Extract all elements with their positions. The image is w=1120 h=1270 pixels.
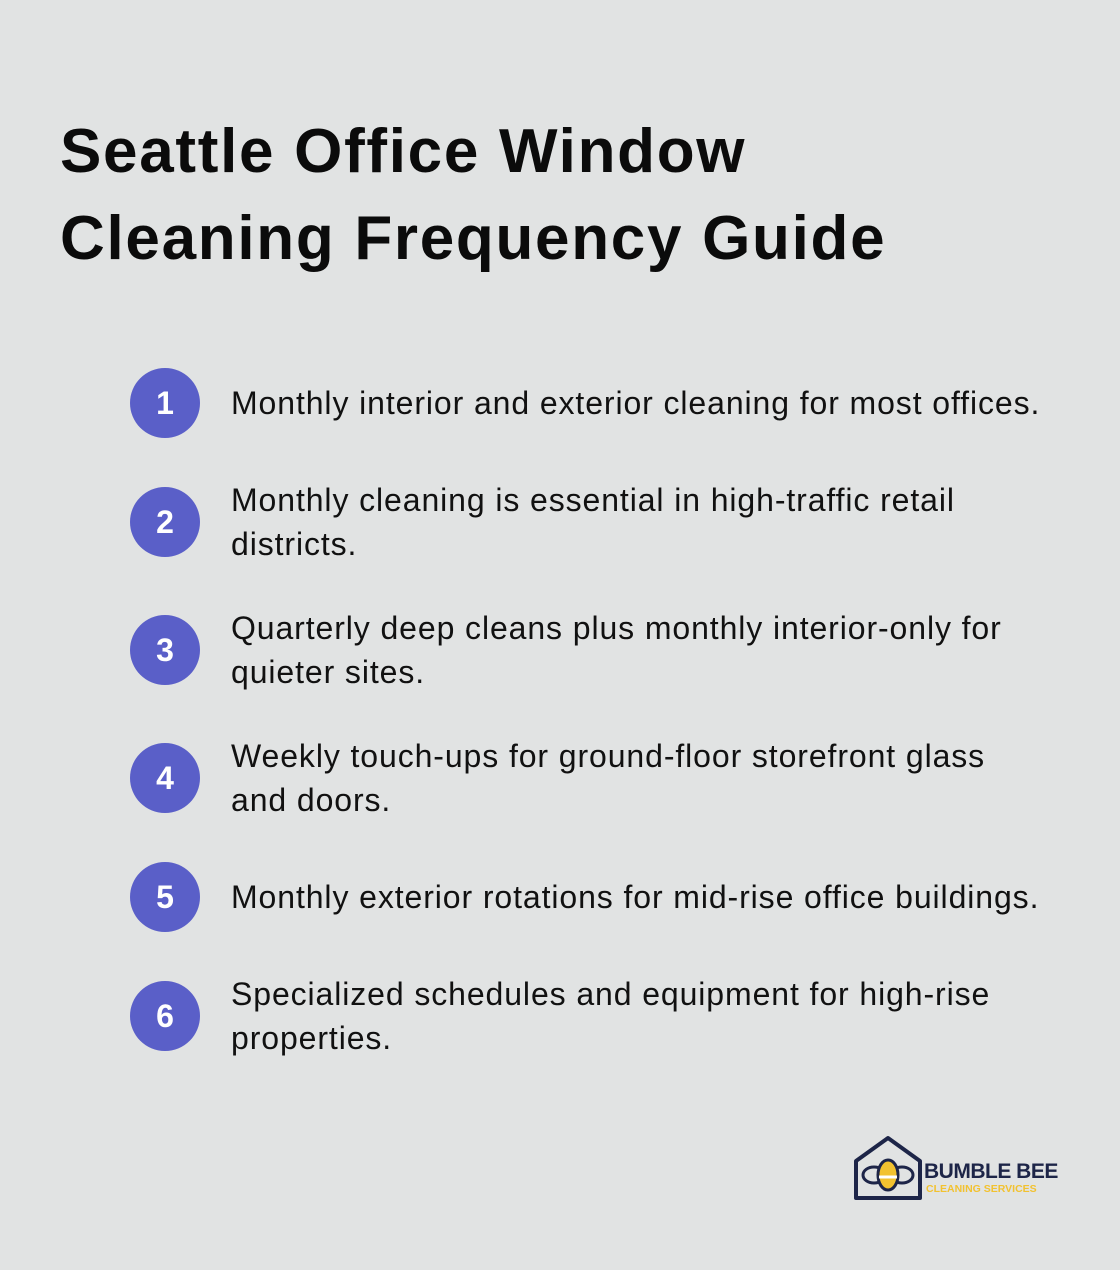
item 3: Quarterly deep cleans plus monthly interior-only for [231, 610, 1002, 646]
item 4: Weekly touch-ups for ground-floor storefront glass [231, 738, 985, 774]
item 2: districts. [231, 526, 357, 562]
item 3: quieter sites. [231, 654, 425, 690]
item 6 [130, 976, 990, 1056]
item 6: 6 [156, 998, 174, 1034]
item 4: 4 [156, 760, 174, 796]
logo: BUMBLE BEE [924, 1160, 1058, 1183]
item 3 [130, 610, 1002, 690]
item 4 [130, 738, 985, 818]
title [60, 117, 886, 273]
title: Seattle Office Window [60, 117, 746, 186]
item 6: properties. [231, 1020, 392, 1056]
logo [854, 1136, 1058, 1200]
item 2: 2 [156, 504, 174, 540]
item 3: 3 [156, 632, 174, 668]
item 1 [130, 368, 1040, 438]
item 6: Specialized schedules and equipment for high-rise [231, 976, 990, 1012]
item 4: and doors. [231, 782, 391, 818]
item 1: Monthly interior and exterior cleaning for most offices. [231, 385, 1040, 421]
item 2 [130, 482, 955, 562]
item 5: 5 [156, 879, 174, 915]
item 2: Monthly cleaning is essential in high-traffic retail [231, 482, 955, 518]
logo: CLEANING SERVICES [926, 1183, 1037, 1195]
title: Cleaning Frequency Guide [60, 204, 886, 273]
item 5: Monthly exterior rotations for mid-rise office buildings. [231, 879, 1039, 915]
item 5 [130, 862, 1039, 932]
item 1: 1 [156, 385, 174, 421]
